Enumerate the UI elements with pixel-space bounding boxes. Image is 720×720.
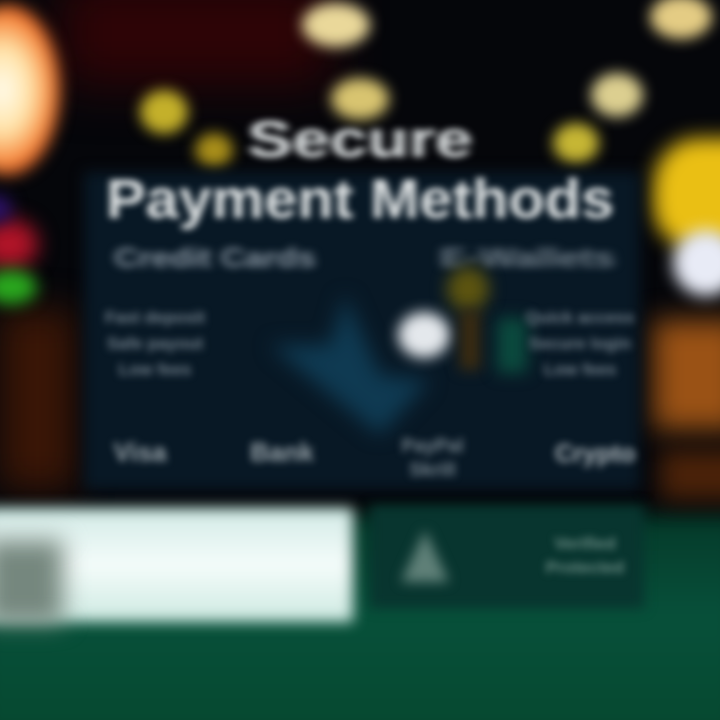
background: green table — [0, 515, 720, 720]
panel: white box — [0, 496, 364, 640]
heading: right column: E-Wallets — [440, 242, 615, 273]
background: brown left side — [0, 310, 75, 490]
icon: white coin — [398, 312, 450, 358]
label: first option: Visa — [113, 437, 166, 467]
icon: yellow figure right — [638, 121, 720, 513]
title: Payment Methods — [106, 167, 614, 230]
text block: left description: Safe payout — [107, 334, 203, 353]
text block: right description: Secure login — [529, 334, 631, 353]
text block: lower card text: Protected — [546, 558, 624, 577]
text block: left description: Fast deposit — [105, 308, 205, 327]
label: third option: PayPal — [401, 436, 464, 457]
icon: lower triangle — [397, 528, 453, 590]
icon: bright orange glow left — [0, 5, 60, 175]
text block: left description — [102, 308, 208, 379]
text block: right description: Low fees — [544, 360, 616, 379]
background: dark red wall — [60, 0, 330, 85]
icon: red and green chips left — [0, 187, 52, 316]
text block: lower card text — [542, 534, 628, 577]
label: third option: Skrill — [409, 460, 456, 481]
text block: right description: Quick access — [526, 308, 634, 327]
text block: lower card text: Verified — [554, 534, 616, 553]
title: Secure — [247, 111, 473, 169]
text block: left description: Low fees — [119, 360, 191, 379]
heading: left column: Credit Cards — [114, 242, 316, 273]
panel: main dark card — [84, 172, 640, 490]
decorative ceiling lights — [130, 0, 720, 174]
panel: green lower card — [370, 505, 644, 608]
text block: right description — [522, 308, 637, 379]
icon: green shield — [497, 318, 527, 373]
title — [104, 111, 617, 234]
label: second option: Bank — [250, 437, 314, 467]
icon: gold key — [438, 260, 498, 376]
chart: central teal check mark — [274, 300, 429, 438]
label: fourth option: Crypto — [555, 440, 636, 468]
label: third option — [398, 434, 467, 481]
